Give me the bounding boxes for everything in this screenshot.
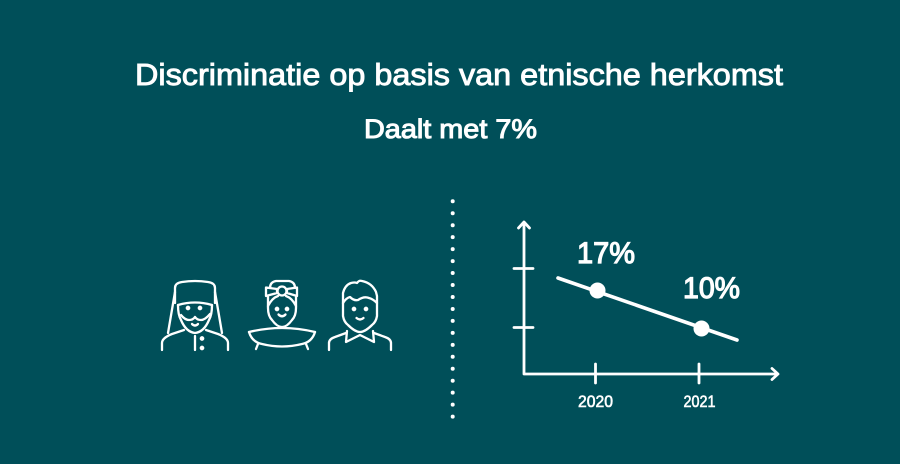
label 10%: 10% <box>683 272 740 305</box>
trend line <box>558 278 737 340</box>
label 17%: 17% <box>577 237 635 270</box>
label 2020: 2020 <box>578 393 613 411</box>
icon: person with headdress and collar <box>249 281 315 349</box>
chart axes <box>514 222 778 383</box>
icon: person with cap and beard <box>162 281 228 350</box>
dotted divider <box>451 201 455 417</box>
label 2021: 2021 <box>684 393 716 411</box>
title: Discriminatie op basis van etnische herkomst <box>135 57 783 92</box>
data point 2021 <box>694 320 710 336</box>
data point 2020 <box>590 282 606 298</box>
icon: young man with collar <box>329 281 391 350</box>
subtitle: Daalt met 7% <box>364 114 537 144</box>
line chart <box>514 222 778 411</box>
